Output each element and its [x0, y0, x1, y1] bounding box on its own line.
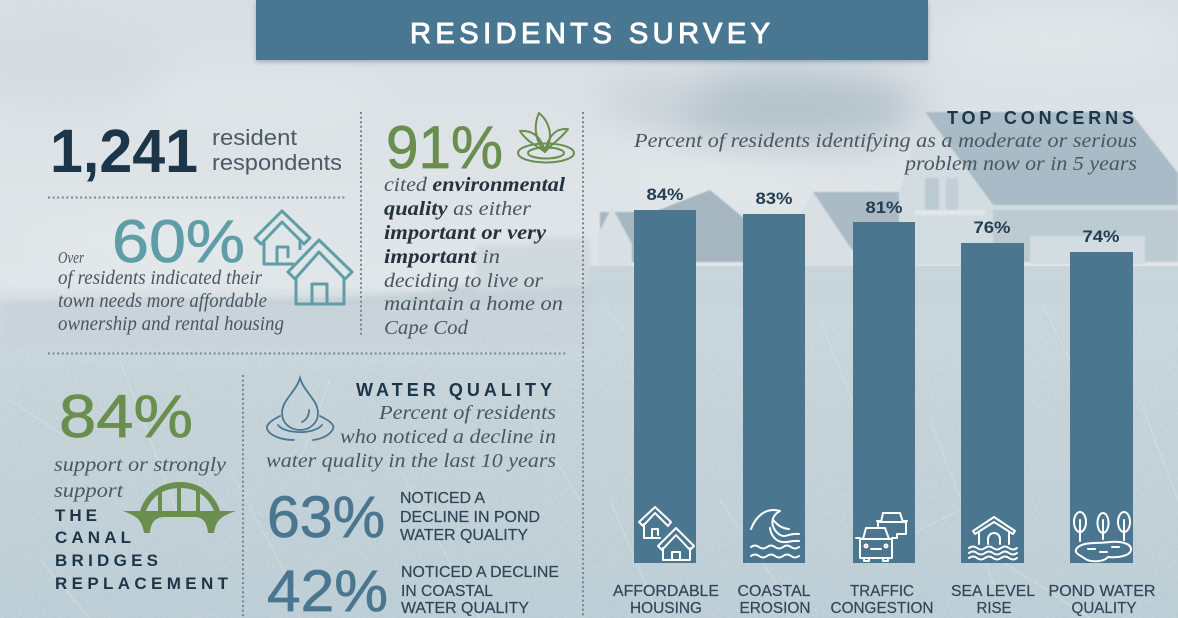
- panel: canal bridges: [54, 383, 236, 593]
- bar: coastal erosion 83%: [738, 189, 811, 617]
- bar: traffic congestion 81%: 81%: [866, 198, 902, 217]
- panel: environmental quality: cited environmental: [384, 174, 565, 196]
- panel: canal bridges: BRIDGES: [55, 551, 158, 570]
- panel: water quality: WATER QUALITY: [356, 380, 552, 400]
- bar: traffic congestion 81%: TRAFFIC: [850, 583, 914, 600]
- stat: coastal water quality: IN COASTAL: [401, 583, 493, 600]
- icon: water drop: [267, 378, 333, 440]
- large house: [899, 112, 1178, 265]
- panel: affordable housing: of residents indicated their: [58, 267, 263, 289]
- bar: pond water quality 74%: QUALITY: [1072, 600, 1136, 617]
- stat: pond water quality: [267, 485, 540, 550]
- bar: sea level rise 76%: [951, 218, 1035, 617]
- panel: water quality: who noticed a decline in: [340, 426, 556, 448]
- panel: affordable housing: Over: [58, 248, 84, 267]
- bar: affordable housing 84%: [613, 185, 719, 617]
- panel: affordable housing: 60%: [112, 208, 245, 275]
- bar: coastal erosion 83%: EROSION: [740, 600, 810, 617]
- panel: environmental quality: deciding to live or: [384, 270, 544, 292]
- stat: pond water quality: DECLINE IN POND: [400, 509, 540, 526]
- panel: respondents: resident: [212, 125, 297, 150]
- panel: water quality: Percent of residents: [378, 402, 556, 424]
- bar: pond water quality 74%: 74%: [1082, 227, 1120, 246]
- panel: canal bridges: CANAL: [55, 528, 131, 547]
- panel: water quality: [266, 378, 559, 618]
- stat: pond water quality: 63%: [267, 485, 385, 550]
- right foreground grass: [590, 266, 1178, 436]
- bar: sea level rise 76%: SEA LEVEL: [951, 583, 1035, 600]
- panel: affordable housing: [58, 208, 352, 335]
- panel: environmental quality: important or very: [384, 222, 547, 244]
- panel: environmental quality: 91%: [386, 114, 503, 181]
- panel: respondents: [50, 117, 342, 185]
- stat: coastal water quality: [267, 559, 559, 618]
- panel: environmental quality: important in: [384, 246, 500, 268]
- bar: affordable housing 84%: HOUSING: [630, 600, 702, 617]
- panel: water quality: water quality in the last 10 years: [266, 450, 556, 472]
- panel: top concerns: TOP CONCERNS: [947, 108, 1134, 128]
- panel: environmental quality: quality as either: [384, 198, 532, 220]
- panel: affordable housing: ownership and rental housing: [58, 313, 284, 335]
- stat: pond water quality: WATER QUALITY: [400, 527, 528, 544]
- panel: canal bridges: REPLACEMENT: [55, 574, 229, 593]
- bar: sea level rise 76%: RISE: [976, 600, 1012, 617]
- icon: flooded house: [969, 517, 1017, 560]
- bar: pond water quality 74%: POND WATER: [1048, 583, 1156, 600]
- icon: pond and trees: [1074, 512, 1131, 561]
- panel: respondents: 1,241: [50, 117, 198, 185]
- panel: canal bridges: support: [54, 480, 124, 502]
- icon: cars: [856, 513, 907, 561]
- distant hill: [0, 268, 640, 350]
- icon: wave: [751, 510, 799, 558]
- title banner: [256, 0, 928, 60]
- mid houses: [633, 190, 900, 268]
- bar: affordable housing 84%: AFFORDABLE: [613, 583, 719, 600]
- panel: canal bridges: THE: [55, 506, 97, 525]
- bar: coastal erosion 83%: 83%: [756, 189, 792, 208]
- panel: environmental quality: maintain a home on: [384, 293, 563, 315]
- panel: canal bridges: support or strongly: [54, 454, 227, 476]
- panel: top concerns: Percent of residents identifying as a moderate or serious: [633, 130, 1137, 152]
- panel: top concerns: problem now or in 5 years: [903, 153, 1137, 175]
- icon: two houses: [255, 211, 352, 304]
- bar: pond water quality 74%: [1048, 227, 1156, 617]
- panel: environmental quality: [384, 113, 574, 339]
- icon: plant with ripples: [518, 113, 574, 162]
- panel: canal bridges: 84%: [59, 383, 193, 450]
- icon: houses: [639, 507, 694, 560]
- panel: environmental quality: Cape Cod: [384, 317, 469, 339]
- bar: traffic congestion 81%: CONGESTION: [830, 600, 934, 617]
- stat: coastal water quality: WATER QUALITY: [401, 600, 529, 617]
- bar: coastal erosion 83%: COASTAL: [738, 583, 811, 600]
- stat: pond water quality: NOTICED A: [400, 490, 486, 507]
- panel: top concerns: [613, 108, 1156, 617]
- panel: affordable housing: town needs more affordable: [58, 290, 267, 312]
- far left houses: [597, 207, 640, 270]
- bar: affordable housing 84%: 84%: [646, 185, 684, 204]
- icon: bridge: [123, 482, 236, 533]
- grass texture: [0, 305, 1178, 618]
- bar: sea level rise 76%: 76%: [974, 218, 1010, 237]
- title banner: RESIDENTS SURVEY: [410, 18, 770, 50]
- bar: traffic congestion 81%: [830, 198, 934, 617]
- stat: coastal water quality: NOTICED A DECLINE: [401, 564, 559, 581]
- panel: respondents: respondents: [212, 150, 342, 175]
